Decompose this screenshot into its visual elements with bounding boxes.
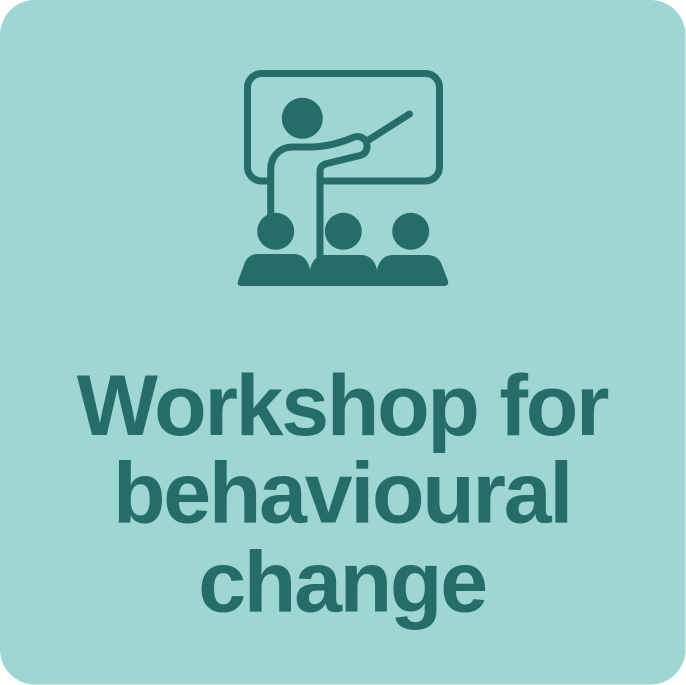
icon: presenter at whiteboard with audience (238, 74, 448, 286)
icon: audience member right (377, 213, 448, 286)
icon: whiteboard (248, 74, 440, 181)
icon: audience member centre (310, 213, 377, 286)
title: behavioural (113, 446, 571, 542)
title: change (198, 534, 486, 630)
icon: presenter body (271, 137, 367, 258)
icon: pointer stick (367, 114, 410, 141)
icon: presenter head (282, 98, 323, 139)
title (77, 358, 609, 630)
title: Workshop for (77, 358, 609, 454)
icon: audience member left (238, 213, 310, 286)
